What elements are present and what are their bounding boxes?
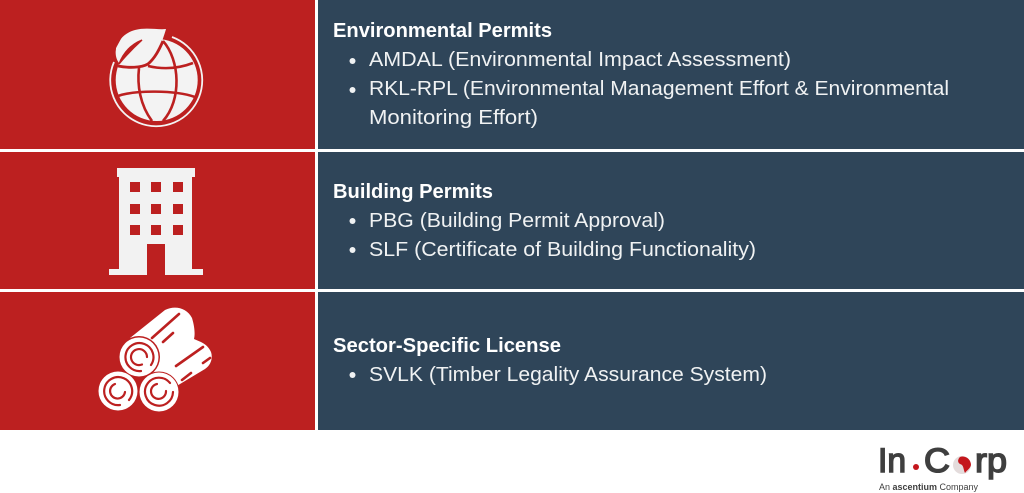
list: sector license items: SVLK (Timber Legality Assurance System) xyxy=(369,363,767,386)
list: building permits items: SLF (Certificate of Building Functionality) xyxy=(369,238,756,261)
logo: InCorp: C xyxy=(924,442,950,480)
heading: Environmental Permits: Environmental Permits xyxy=(333,20,552,42)
logo: InCorp: An ascentium Company xyxy=(879,482,978,492)
panel: sector license background xyxy=(318,292,1024,430)
list: environmental permits items xyxy=(350,48,949,129)
icon: globe with leaf xyxy=(110,29,202,126)
panel: environmental permits background xyxy=(318,0,1024,149)
heading: Building Permits: Building Permits xyxy=(333,181,493,203)
logo: InCorp: rp xyxy=(975,442,1007,480)
heading: Sector-Specific License: Sector-Specific License xyxy=(333,335,561,357)
logo: InCorp: In xyxy=(878,442,906,480)
list: building permits items: PBG (Building Permit Approval) xyxy=(369,209,665,232)
panel: building permits background xyxy=(318,152,1024,289)
panel: environmental icon background xyxy=(0,0,315,149)
logo: InCorp xyxy=(878,442,1007,492)
icon: timber logs xyxy=(98,308,212,412)
list: building permits items xyxy=(350,209,756,261)
icon: building xyxy=(109,168,203,275)
list: environmental permits items: AMDAL (Environmental Impact Assessment) xyxy=(369,48,791,71)
panel: building icon background xyxy=(0,152,315,289)
panel: sector icon background xyxy=(0,292,315,430)
list: environmental permits items: RKL-RPL (Environmental Management Effort & Environmental xyxy=(369,77,949,100)
list: environmental permits items: Monitoring Effort) xyxy=(369,106,538,129)
